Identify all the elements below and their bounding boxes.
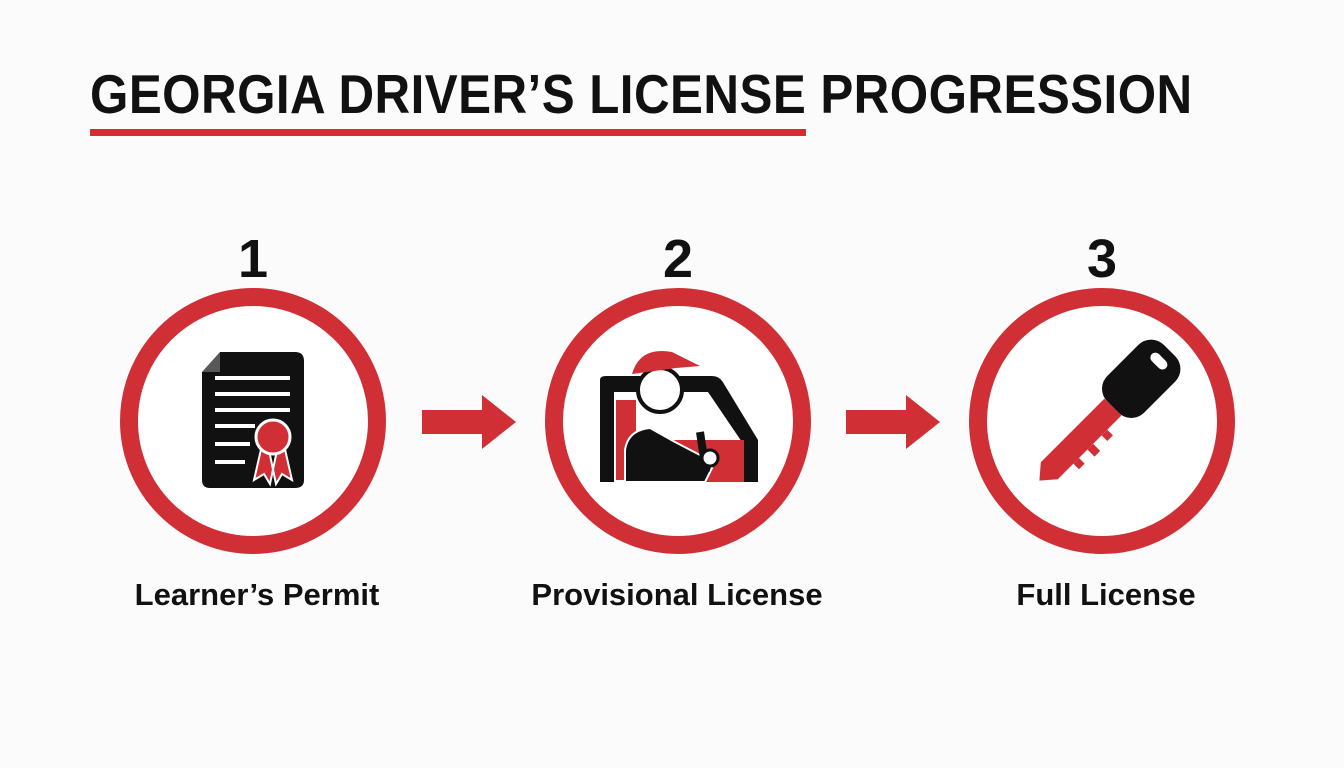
title underline — [90, 129, 806, 136]
icon: certificate — [202, 352, 304, 488]
icon: key — [1021, 332, 1188, 499]
arrow 2 — [846, 395, 940, 449]
label 3: Full License — [1016, 577, 1196, 612]
icon: driver — [600, 351, 758, 482]
circle 2 — [554, 297, 802, 545]
title: GEORGIA DRIVER’S LICENSE PROGRESSION — [90, 63, 1193, 125]
circle 3 — [978, 297, 1226, 545]
arrow 1 — [422, 395, 516, 449]
step number 1: 1 — [238, 229, 268, 289]
step number 3: 3 — [1087, 229, 1117, 289]
circle 1 — [129, 297, 377, 545]
step number 2: 2 — [663, 229, 693, 289]
label 2: Provisional License — [531, 577, 823, 612]
label 1: Learner’s Permit — [135, 577, 379, 612]
